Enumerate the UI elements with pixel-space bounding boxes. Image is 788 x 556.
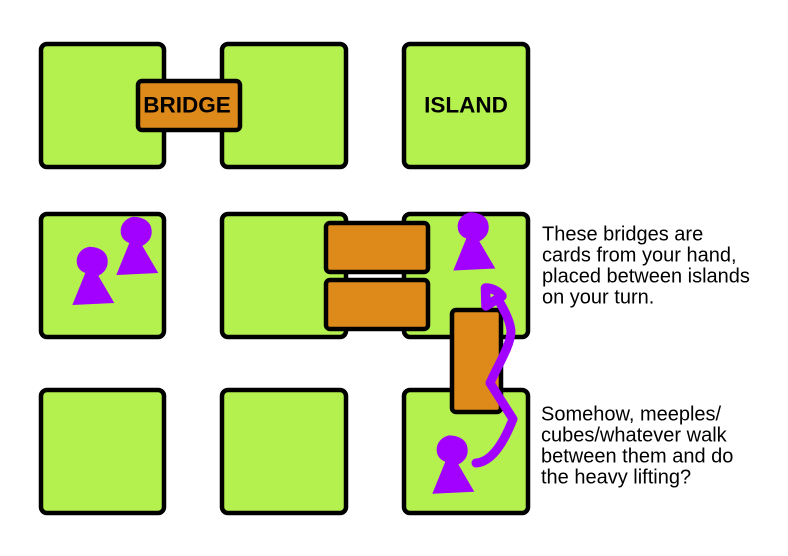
bridge: center lower (326, 280, 428, 329)
meeple: upper right of middle-left island (116, 217, 158, 275)
island: center (222, 214, 346, 337)
island: bottom left (41, 390, 164, 513)
bridge: vertical (452, 310, 501, 412)
text block: about bridges: cards from your hand, (542, 244, 737, 266)
bridge: labelled BRIDGE (138, 81, 240, 130)
meeple: middle right island (453, 212, 495, 270)
text block: about bridges: placed between islands (542, 266, 750, 288)
meeple: bottom right island (432, 435, 474, 494)
island: middle left (41, 214, 164, 337)
island: top middle (222, 44, 346, 167)
bridge: center upper (326, 223, 428, 272)
text block: about meeples: cubes/whatever walk (541, 424, 728, 446)
island: top right labelled ISLAND (404, 44, 528, 167)
label: ISLAND: ISLAND (424, 92, 508, 118)
text block: about bridges: on your turn. (542, 286, 654, 308)
meeple: lower left of middle-left island (72, 247, 114, 305)
label: BRIDGE: BRIDGE (143, 92, 231, 118)
island: middle right (404, 214, 528, 337)
island: bottom middle (222, 390, 346, 513)
text block: about meeples: the heavy lifting? (541, 466, 691, 488)
text block: about meeples: between them and do (541, 446, 733, 468)
text block: about bridges: These bridges are (542, 224, 703, 246)
arrow: meeple walking path across bridge (476, 288, 513, 463)
text block: about meeples: Somehow, meeples/ (541, 404, 721, 426)
island: bottom right (404, 390, 528, 513)
island: top left (41, 44, 164, 167)
